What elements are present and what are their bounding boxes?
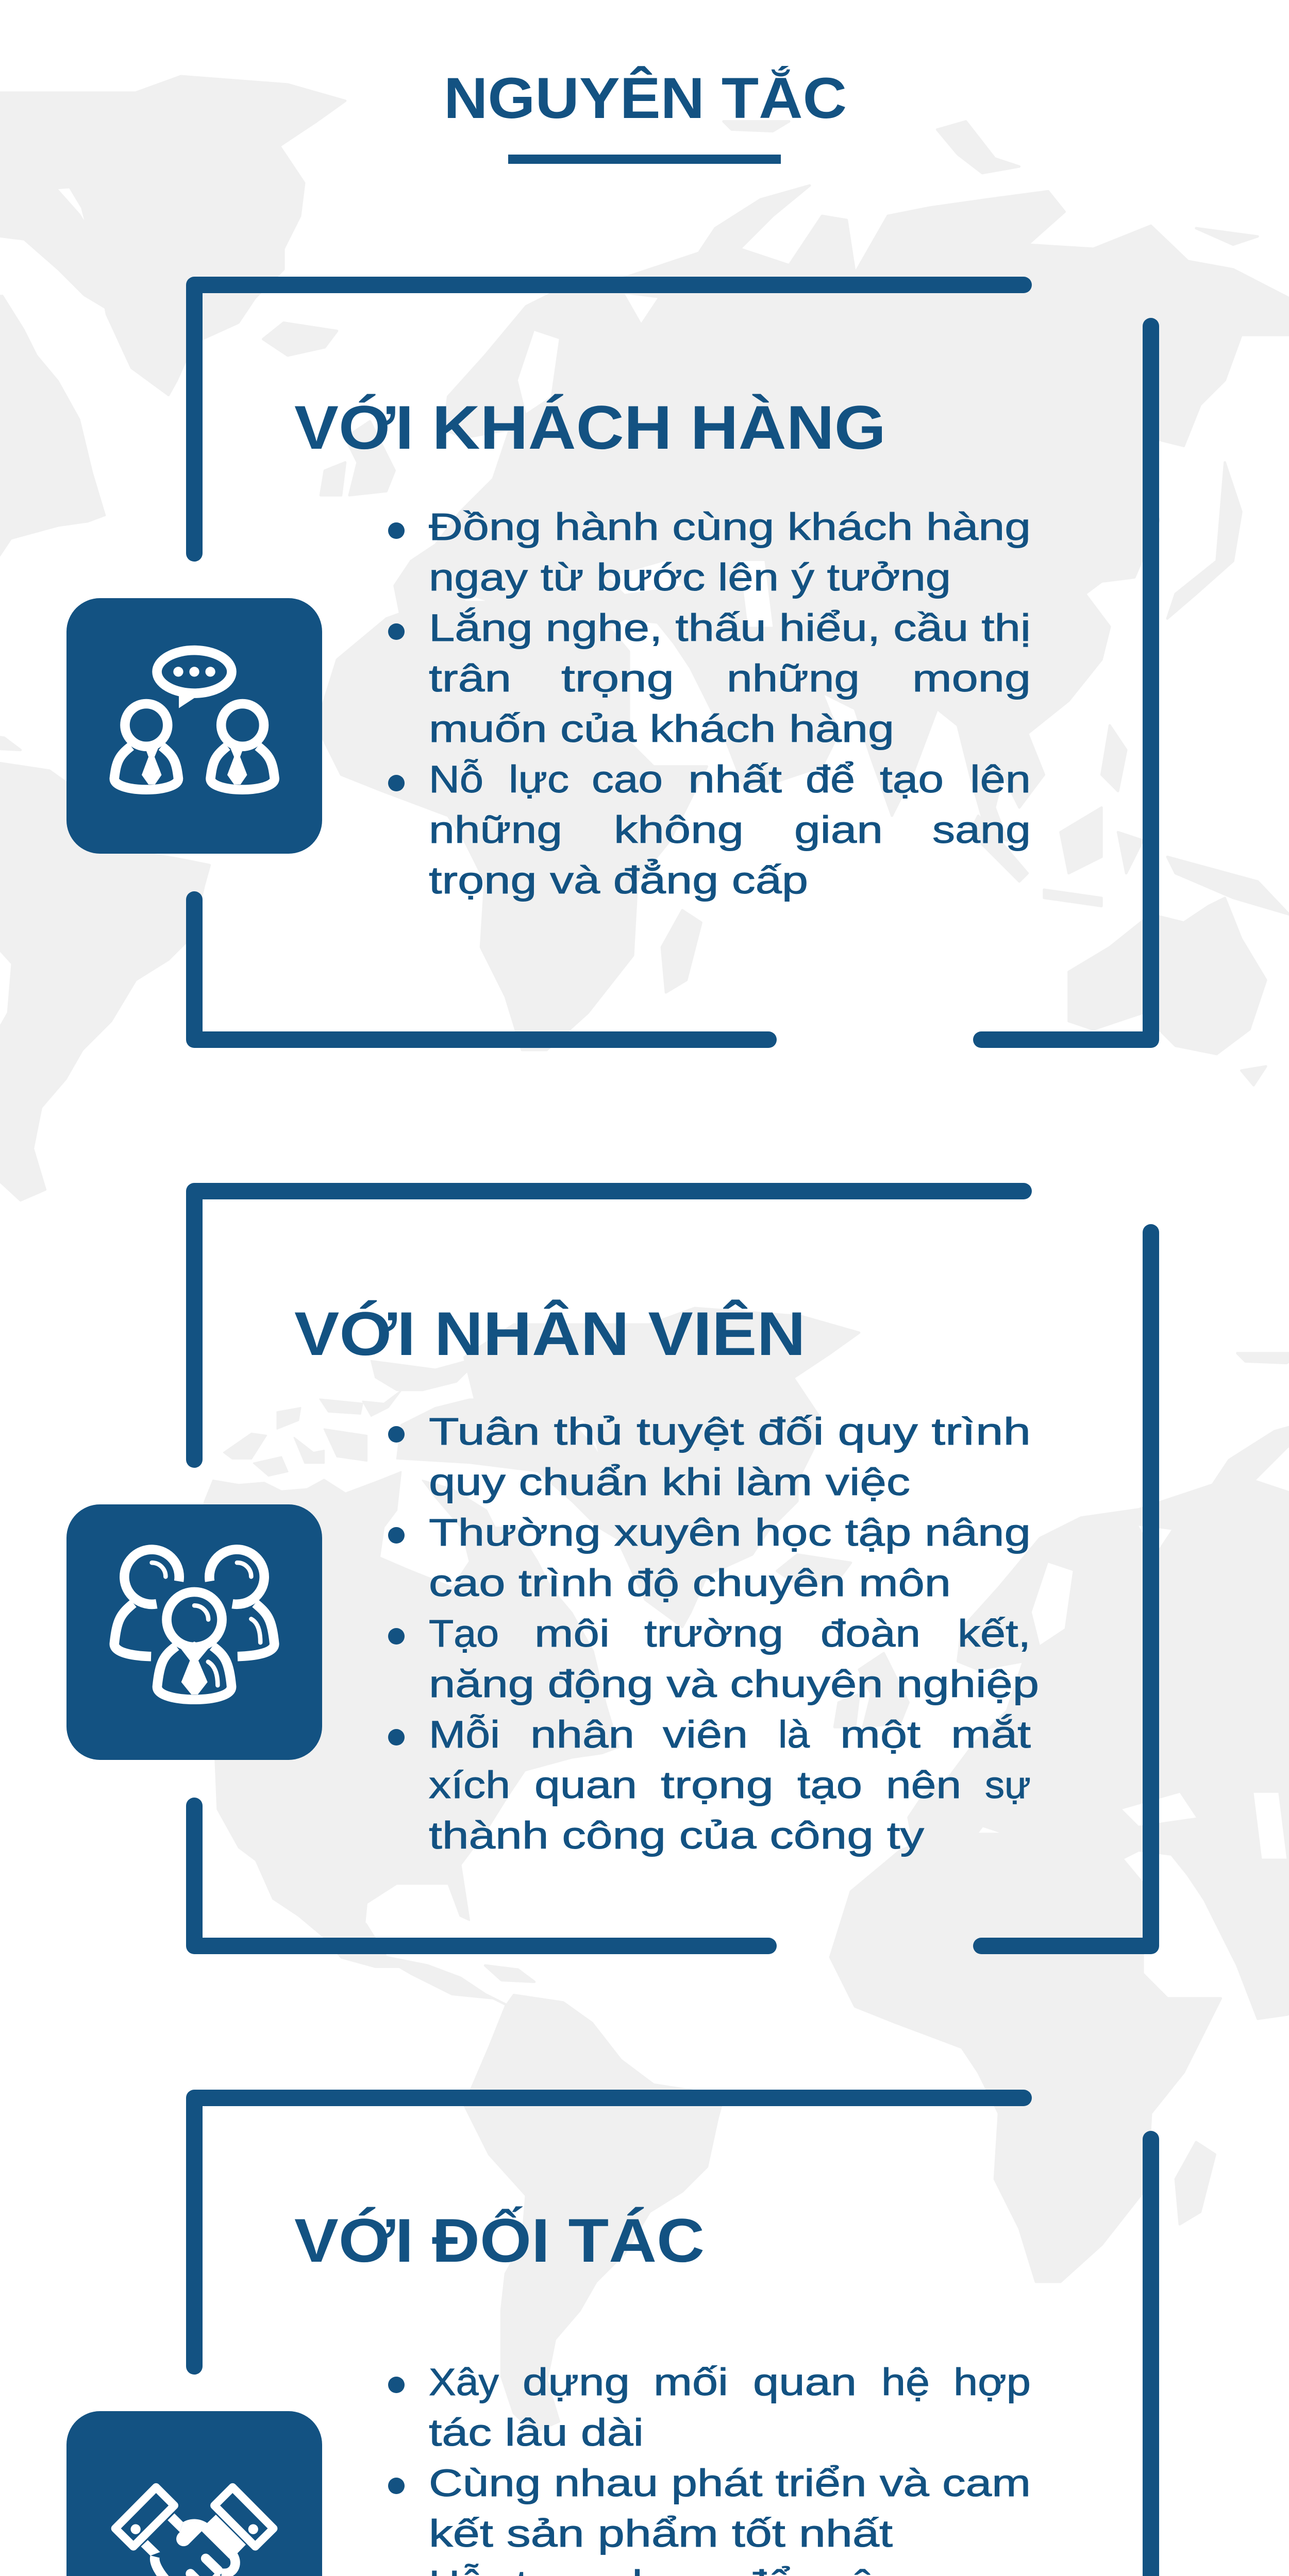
bullet list: tạo [880,758,944,801]
panel: với nhân viên [66,1191,1151,1946]
title [444,66,847,164]
bullet list: những [727,657,860,700]
bullet list: môi [534,1612,610,1655]
bullet list: tạo [797,1764,862,1806]
bullet list: trọng [561,657,674,700]
bullet list: cao [592,758,663,801]
bullet list: mong [912,657,1031,700]
bullet list: trọng [661,1764,774,1806]
bullet list: Tạo [429,1612,499,1655]
bullet list: hợp [953,2361,1031,2403]
bullet list: tác lâu dài [429,2411,644,2454]
bullet list: ngay từ bước lên ý tưởng [429,556,951,599]
frame: đối tác [194,2098,1151,2576]
bullet list: nên [886,1764,961,1806]
bullet list: lực [509,758,569,801]
bullet list: kết, [958,1612,1031,1655]
bullet list: trân [429,657,511,700]
icon: two people talking [66,598,322,854]
bullet list: xích [429,1764,510,1806]
frame: khách hàng [194,285,1151,1040]
bullet list: quan [753,2361,857,2403]
bullet list: Cùng nhau phát triển và cam [429,2462,1031,2504]
bullet list: lên [970,758,1031,801]
icon: team of three people [66,1504,322,1760]
heading: VỚI ĐỐI TÁC [294,2206,705,2275]
bullet list: năng động và chuyên nghiệp [429,1663,1039,1705]
bullet list: không [614,808,744,851]
bullet list: kết sản phẩm tốt nhất [429,2512,893,2555]
bullet list: nhất [688,758,782,801]
bullet list: là [778,1713,810,1756]
bullet list: mắt [951,1713,1031,1756]
heading: VỚI NHÂN VIÊN [294,1299,806,1368]
bullet list: trọng và đẳng cấp [429,859,808,902]
bullet list: viên [663,1713,748,1756]
bullet list: những [429,808,562,851]
bullet list: Xây [429,2361,499,2403]
bullet list [388,1410,1039,1857]
bullet list [388,2361,1031,2576]
bullet list: để [806,758,855,801]
bullet list: nhân [530,1713,634,1756]
bullet list: Tuân thủ tuyệt đối quy trình [429,1410,1031,1453]
bullet list: đoàn [821,1612,920,1655]
frame: nhân viên [194,1191,1151,1946]
bullet list [388,505,1031,902]
bullet list: cao trình độ chuyên môn [429,1562,951,1604]
bullet list: hệ [881,2361,930,2403]
bullet list: muốn của khách hàng [429,707,894,750]
bullet list: Đồng hành cùng khách hàng [429,505,1031,548]
bullet list: quan [534,1764,637,1806]
bullet list: Thường xuyên học tập nâng [429,1511,1031,1554]
bullet list: sự [985,1764,1031,1806]
bullet list: gian [794,808,883,851]
title: NGUYÊN TẮC [444,66,847,130]
icon: handshake [66,2411,322,2576]
bullet list: dựng [523,2361,630,2403]
bullet list: trường [644,1612,783,1655]
bullet list: Nỗ [429,758,483,801]
bullet list: quy chuẩn khi làm việc [429,1461,910,1503]
bullet list: mối [654,2361,728,2403]
bullet list: sang [932,808,1031,851]
heading: VỚI KHÁCH HÀNG [294,393,886,462]
panel: với đối tác [66,2098,1151,2576]
bullet list: một [840,1713,921,1756]
bullet list: Mỗi [429,1713,500,1756]
panel: với khách hàng [66,285,1151,1040]
bullet list: Lắng nghe, thấu hiểu, cầu thị [429,606,1031,649]
bullet list: thành công của công ty [429,1814,924,1857]
